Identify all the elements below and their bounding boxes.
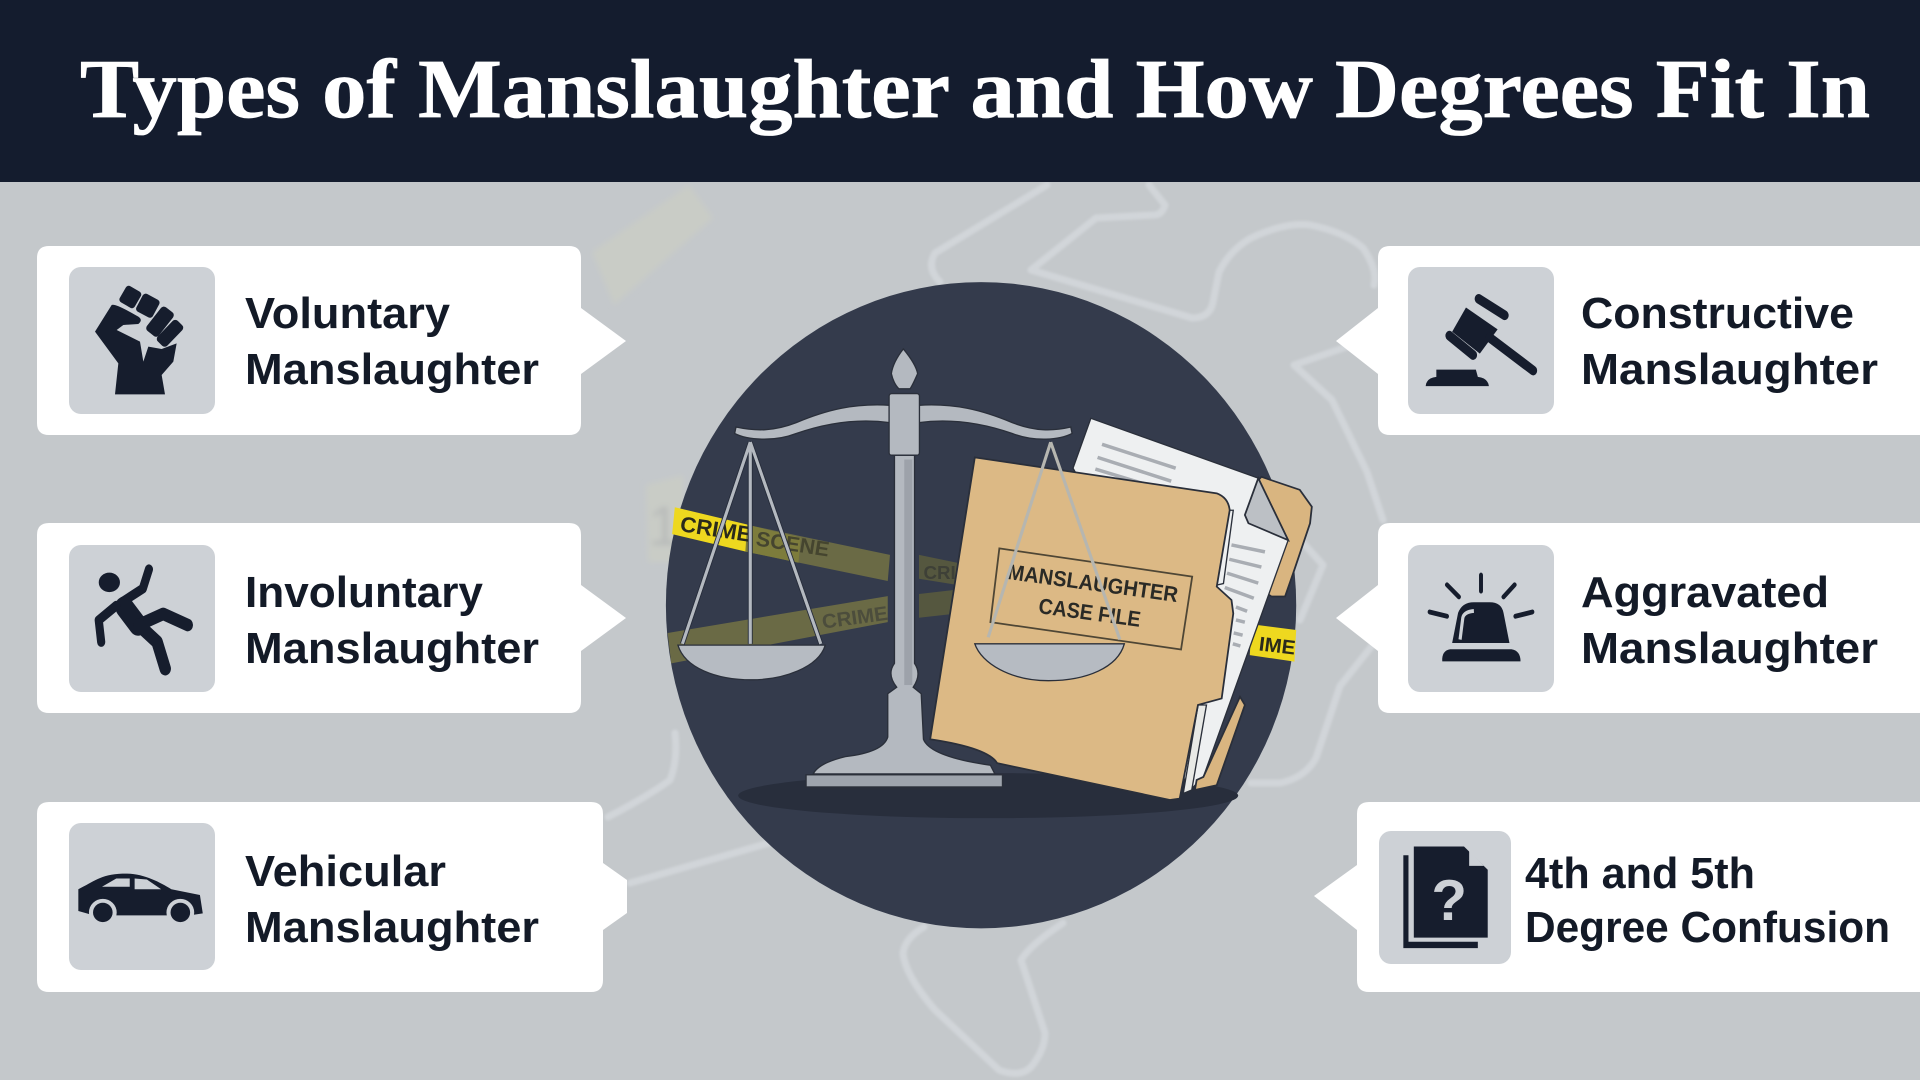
crime scene tape xyxy=(668,507,1297,663)
crime scene tape: IME xyxy=(1258,634,1297,660)
crime scene tape: SCENE xyxy=(754,528,831,561)
label: Aggravated xyxy=(1581,568,1829,617)
faded evidence placards background xyxy=(592,185,713,562)
icon: car xyxy=(78,874,203,926)
folder label: CASE FILE xyxy=(1037,594,1142,632)
icon: document with question mark xyxy=(1406,847,1488,945)
card: Involuntary Manslaughter: Manslaughter xyxy=(245,624,539,673)
card: 4th and 5th Degree Confusion: Degree Confusion xyxy=(1525,903,1890,952)
card: Involuntary Manslaughter xyxy=(37,523,626,713)
card: Voluntary Manslaughter: Manslaughter xyxy=(245,345,539,394)
inner white sheet edge xyxy=(1216,510,1233,585)
chalk body outline background xyxy=(608,185,1383,1073)
card: 4th and 5th Degree Confusion xyxy=(1314,802,1920,992)
card: Aggravated Manslaughter xyxy=(1336,523,1920,713)
crime scene tape: CRIME xyxy=(821,603,889,634)
icon: document with question mark: ? xyxy=(1431,870,1467,933)
manila folder front xyxy=(930,457,1233,800)
dark circle backdrop xyxy=(666,282,1296,928)
label: Involuntary xyxy=(245,568,484,617)
icon: siren light xyxy=(1430,575,1532,661)
label: 4th and 5th xyxy=(1525,849,1755,898)
icon: falling person xyxy=(99,569,188,669)
back folder tab xyxy=(1220,477,1312,597)
icon: gavel xyxy=(1426,299,1533,386)
card: Aggravated Manslaughter: Manslaughter xyxy=(1581,624,1878,673)
card: Constructive Manslaughter: Manslaughter xyxy=(1581,345,1878,394)
icon: raised fist xyxy=(95,285,185,394)
right pan and strings xyxy=(975,442,1124,681)
folder label: MANSLAUGHTER xyxy=(1006,559,1180,607)
lower back folder xyxy=(1195,697,1245,790)
central illustration: scales and case file xyxy=(666,282,1312,928)
floor shadow xyxy=(738,773,1238,818)
card: Vehicular Manslaughter: Manslaughter xyxy=(245,903,539,952)
label: Vehicular xyxy=(245,847,446,896)
left pan and strings xyxy=(678,442,825,680)
label: Voluntary xyxy=(245,289,451,338)
crime scene tape: CRI xyxy=(923,562,956,583)
folder page layers xyxy=(1183,705,1206,793)
card: Vehicular Manslaughter xyxy=(37,802,627,992)
scale column xyxy=(735,349,1072,787)
card: Voluntary Manslaughter xyxy=(37,246,626,435)
title: Types of Manslaughter and How Degrees Fit In xyxy=(80,43,1870,136)
loose papers xyxy=(1073,418,1288,793)
header band xyxy=(0,0,1920,182)
faded evidence placards background: 1 xyxy=(648,494,680,557)
crime scene tape: CRIME xyxy=(678,512,753,547)
card: Constructive Manslaughter xyxy=(1336,246,1920,435)
label: Constructive xyxy=(1581,289,1854,338)
folder label xyxy=(990,548,1192,649)
